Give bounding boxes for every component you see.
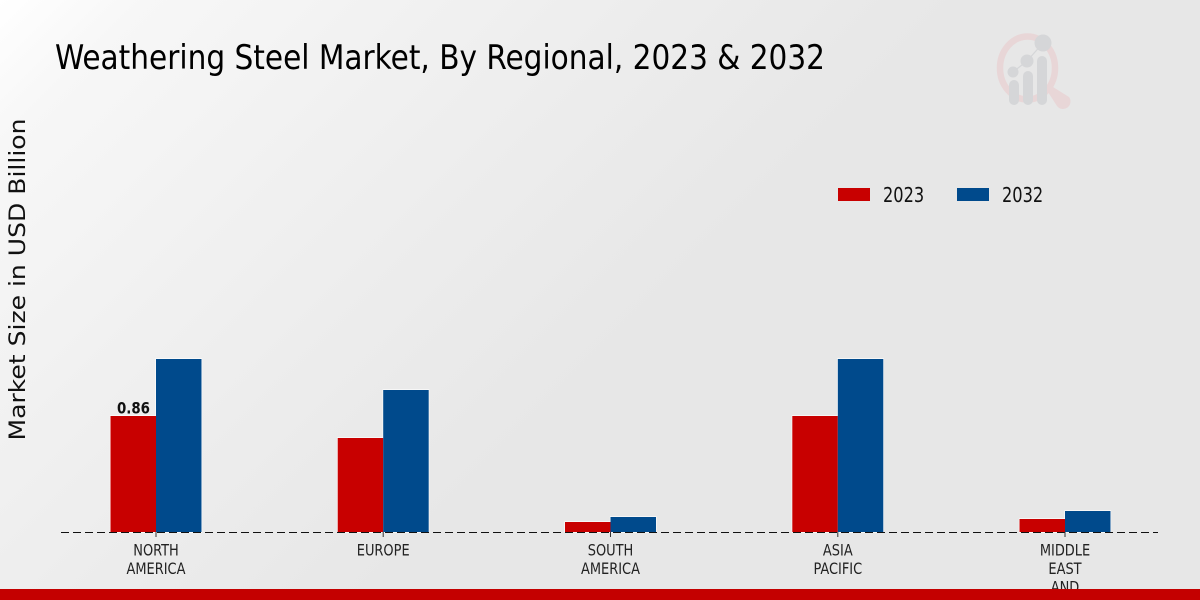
x axis label: North America: AMERICA — [127, 559, 186, 578]
x axis label: Middle East and: AND — [1051, 578, 1079, 597]
bars: Europe — [338, 390, 429, 532]
legend: 2032 — [1002, 184, 1043, 207]
bars: Middle East and Africa — [1020, 511, 1110, 532]
x axis label: Europe: EUROPE — [357, 541, 410, 560]
footer band — [0, 589, 1200, 600]
y axis label: Market Size in USD Billion — [5, 118, 31, 440]
icon: watermark logo magnifier with bars — [1000, 34, 1070, 109]
bar chart — [61, 359, 1158, 537]
legend: 2023 — [883, 184, 924, 207]
bars: South America — [565, 517, 656, 532]
x axis label: North America — [127, 541, 186, 578]
x axis label: Middle East and: EAST — [1048, 559, 1082, 578]
legend — [838, 184, 1043, 207]
x axis label: Middle East and — [1040, 541, 1090, 597]
value label: 0.86 — [117, 399, 150, 418]
x axis label: Asia Pacific — [813, 541, 862, 578]
x axis label: Asia Pacific: ASIA — [823, 541, 853, 560]
x axis label: South America — [581, 541, 641, 578]
x axis label: Middle East and: MIDDLE — [1040, 541, 1090, 560]
x axis label: North America: NORTH — [133, 541, 179, 560]
bars: North America — [110, 359, 202, 532]
x axis label: South America: SOUTH — [588, 541, 633, 560]
title: Weathering Steel Market, By Regional, 2023 & 2032 — [55, 38, 825, 77]
x axis label: South America: AMERICA — [581, 559, 641, 578]
x axis baseline — [61, 532, 1158, 534]
x axis label: Asia Pacific: PACIFIC — [813, 559, 862, 578]
bars: Asia Pacific — [792, 359, 883, 532]
